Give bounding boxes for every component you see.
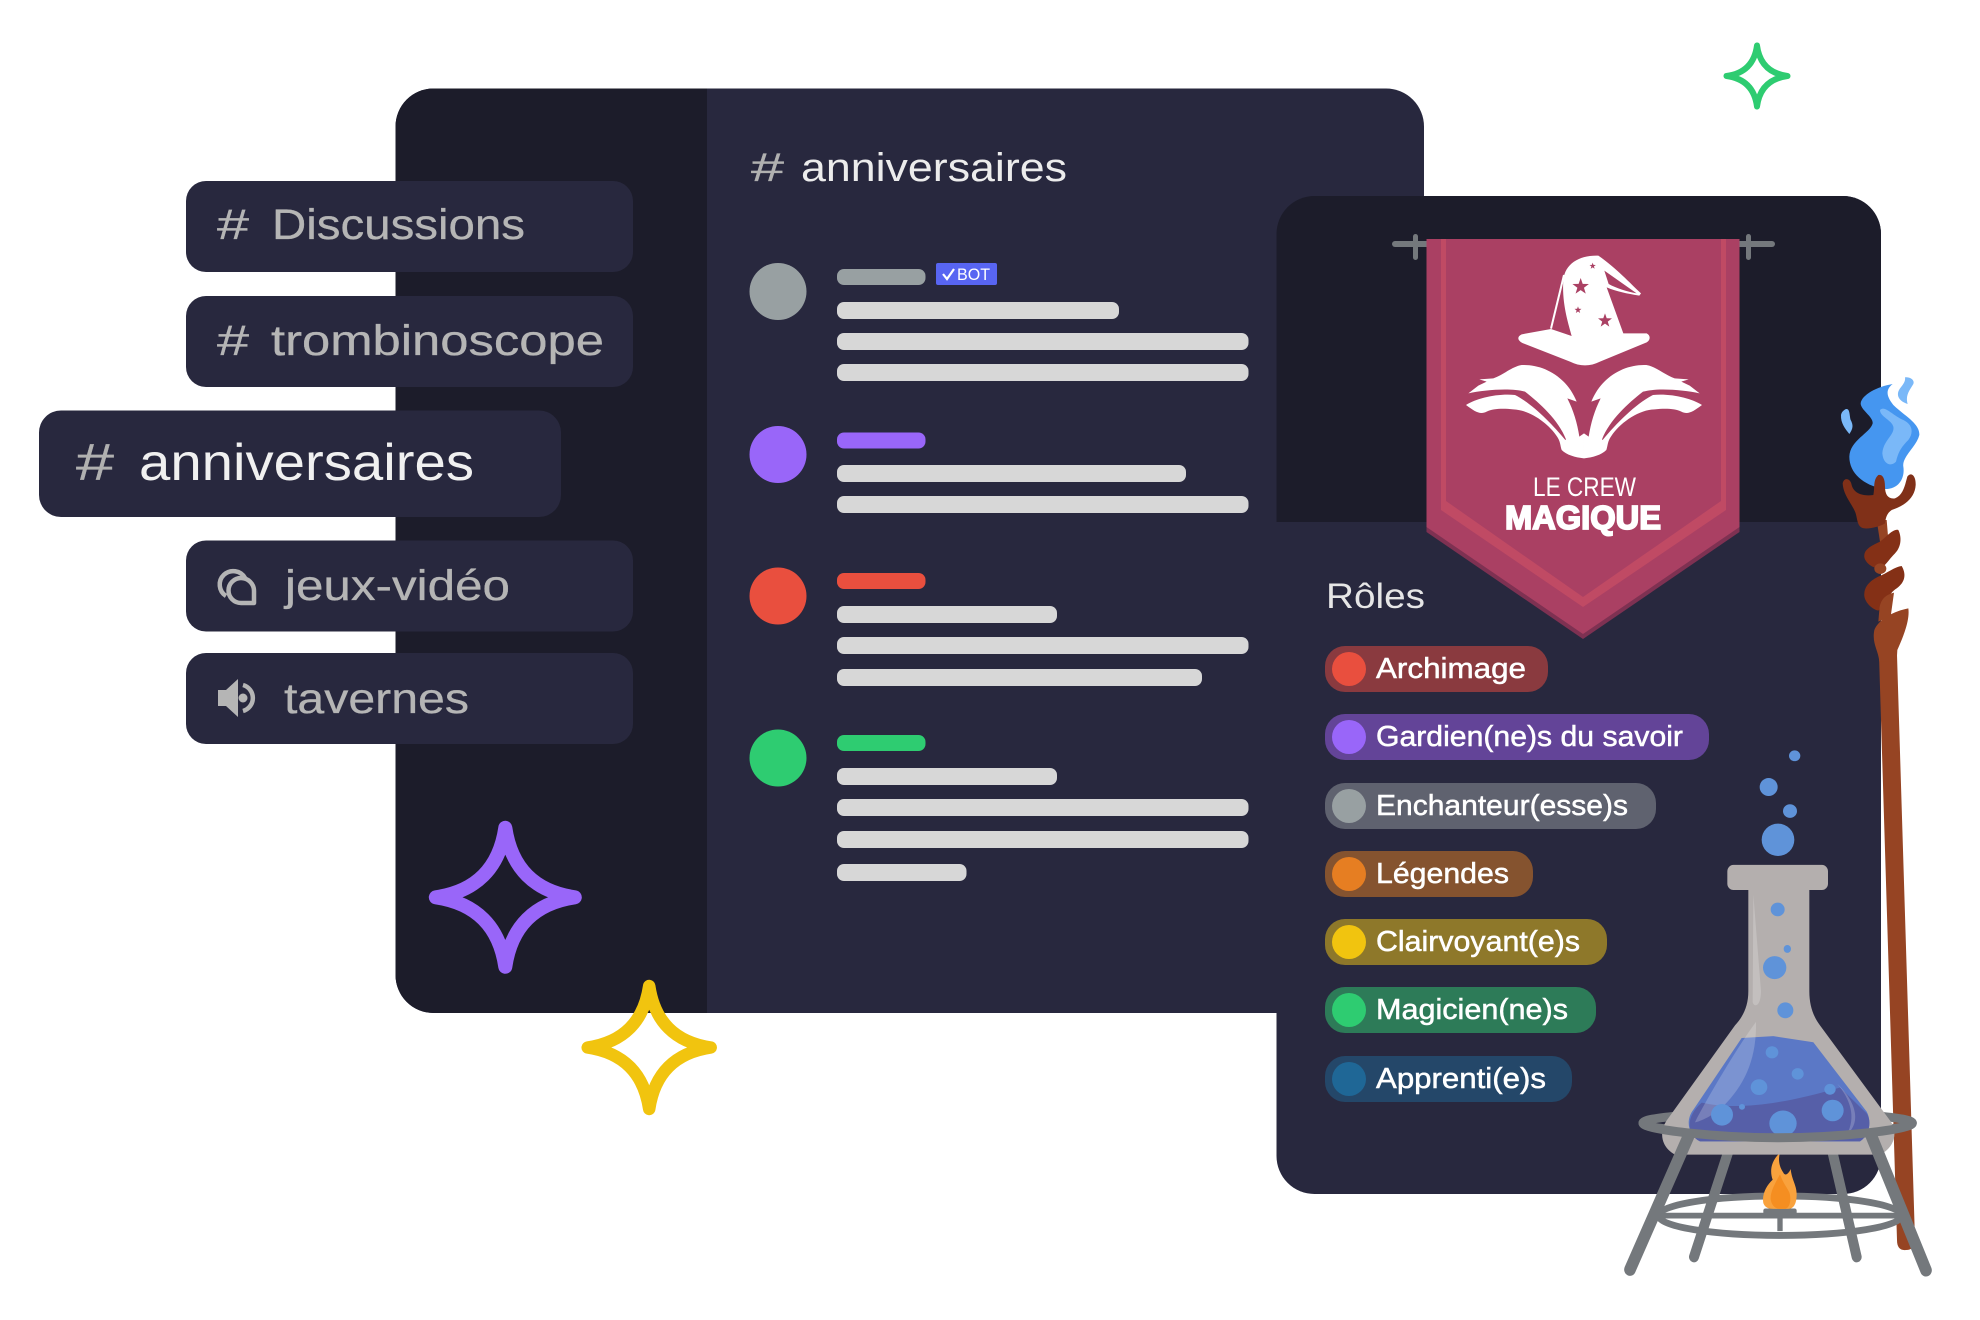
icon: speaker	[218, 679, 253, 717]
banner text: LE CREW: LE CREW	[1533, 472, 1636, 502]
message: red user	[750, 568, 1248, 686]
icon: blue flame	[1841, 377, 1919, 489]
role: Archimage	[1325, 646, 1548, 692]
logo: wizard hat and book	[1466, 256, 1702, 458]
role: Archimage: Archimage	[1376, 653, 1526, 685]
chat heading: anniversaires	[801, 146, 1067, 190]
icon: open book	[1466, 365, 1702, 458]
channel chip: trombinoscope: trombinoscope	[271, 317, 604, 365]
flask lip	[1727, 865, 1828, 890]
channel chip: tavernes: tavernes	[284, 675, 469, 723]
tripod: front	[1630, 1123, 1926, 1270]
channel chip: jeux-vidéo: jeux-vidéo	[283, 562, 510, 610]
role: Légendes: Légendes	[1376, 858, 1509, 890]
channel chip: anniversaires (active)	[39, 410, 561, 517]
message: green user	[750, 730, 1248, 881]
tripod: back	[1643, 1113, 1913, 1257]
channel chip: trombinoscope: #	[217, 317, 249, 365]
channel chip: anniversaires (active): anniversaires	[139, 434, 474, 492]
potion liquid	[1689, 894, 1869, 1141]
badge: bot: BOT	[957, 265, 990, 284]
channel chip: trombinoscope	[186, 296, 633, 387]
role: Gardien(ne)s du savoir: Gardien(ne)s du savoir	[1376, 721, 1683, 753]
potion flask on tripod	[1630, 750, 1926, 1270]
sparkle: green	[1726, 46, 1788, 106]
wizard staff	[1841, 377, 1919, 1250]
panel: chat window	[396, 88, 1424, 1013]
heading: Rôles: Rôles	[1326, 577, 1425, 616]
role: Apprenti(e)s	[1325, 1056, 1572, 1102]
banner text: MAGIQUE: MAGIQUE	[1505, 499, 1661, 536]
role: Magicien(ne)s: Magicien(ne)s	[1376, 994, 1568, 1026]
icon: chat bubbles	[220, 571, 254, 603]
role: Enchanteur(esse)s: Enchanteur(esse)s	[1376, 790, 1628, 822]
message: purple user	[750, 426, 1248, 513]
role: Clairvoyant(e)s	[1325, 919, 1607, 965]
message: bot	[750, 263, 1248, 381]
channel chip: Discussions: Discussions	[272, 201, 525, 249]
flask body	[1662, 890, 1894, 1155]
bubbles	[1711, 750, 1844, 1136]
chat heading: #	[751, 146, 785, 190]
channel chip: anniversaires (active): #	[76, 434, 114, 492]
panel: roles	[1276, 196, 1881, 1194]
role: Apprenti(e)s: Apprenti(e)s	[1376, 1063, 1546, 1095]
channel chip: Discussions	[186, 181, 633, 272]
role: Légendes	[1325, 851, 1533, 897]
role: Magicien(ne)s	[1325, 987, 1596, 1033]
burner and flame	[1763, 1153, 1797, 1215]
role: Gardien(ne)s du savoir	[1325, 714, 1709, 760]
banner: Le Crew Magique	[1392, 234, 1775, 639]
channel chip: tavernes	[186, 653, 633, 744]
sparkle: purple	[436, 828, 575, 967]
badge: bot	[936, 263, 997, 285]
channel chip: jeux-vidéo	[186, 540, 633, 632]
channel chip: Discussions: #	[217, 201, 249, 249]
role: Enchanteur(esse)s	[1325, 783, 1656, 829]
role: Clairvoyant(e)s: Clairvoyant(e)s	[1376, 926, 1580, 958]
icon: wizard hat	[1518, 256, 1650, 365]
sparkle: yellow	[588, 986, 711, 1109]
